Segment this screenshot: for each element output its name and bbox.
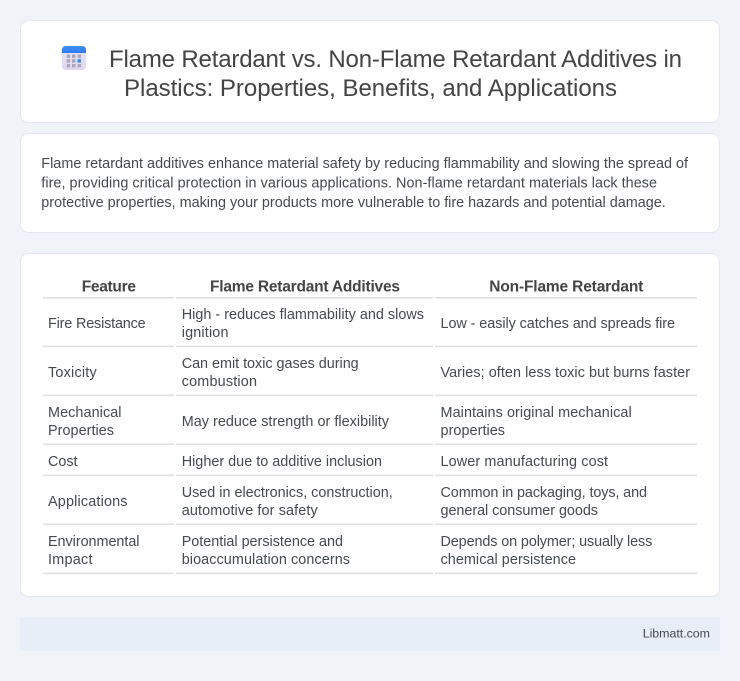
- row: environmental impact: chemical persistence: [440, 552, 576, 568]
- table header row: Non-Flame Retardant: [489, 279, 643, 296]
- row: environmental impact: Depends on polymer; usually less: [440, 534, 652, 550]
- row: fire resistance: High - reduces flammability and slows: [182, 307, 424, 323]
- title: Plastics: Properties, Benefits, and Applications: [124, 75, 617, 102]
- comparison table panel: [20, 254, 720, 596]
- row: mechanical properties: [48, 405, 632, 439]
- row: environmental impact: Environmental: [48, 534, 140, 550]
- table header row: Flame Retardant Additives: [210, 279, 400, 296]
- row: environmental impact: Potential persistence and: [182, 534, 343, 550]
- row: environmental impact: [48, 534, 652, 568]
- row: toxicity: Can emit toxic gases during: [182, 356, 359, 372]
- row: applications: Common in packaging, toys, and: [440, 485, 647, 501]
- row: fire resistance: ignition: [182, 325, 228, 341]
- title: Flame Retardant vs. Non-Flame Retardant Additives in: [109, 46, 682, 73]
- intro text: fire, providing critical protection in various applications. Non-flame retardant materials lack these: [41, 176, 657, 192]
- row: toxicity: combustion: [182, 374, 257, 390]
- intro text: [41, 156, 689, 211]
- table header row: Feature: [82, 279, 136, 296]
- row: toxicity: Toxicity: [48, 365, 97, 381]
- row: applications: general consumer goods: [440, 503, 598, 519]
- row: mechanical properties: Mechanical: [48, 405, 122, 421]
- table header row: [82, 279, 643, 296]
- row: mechanical properties: Maintains original mechanical: [440, 405, 632, 421]
- intro panel: [20, 134, 720, 232]
- row: cost: Higher due to additive inclusion: [182, 454, 382, 470]
- row: fire resistance: Fire Resistance: [48, 316, 146, 332]
- row: toxicity: Varies; often less toxic but burns faster: [440, 365, 690, 381]
- row: mechanical properties: May reduce strength or flexibility: [182, 414, 390, 430]
- intro text: protective properties, making your products more vulnerable to fire hazards and potential damage.: [41, 195, 666, 211]
- row: applications: Used in electronics, construction,: [182, 485, 393, 501]
- row: mechanical properties: properties: [440, 423, 505, 439]
- row: fire resistance: [48, 307, 675, 341]
- row: applications: [48, 485, 647, 519]
- icon: calendar: [62, 46, 86, 70]
- footer bar: [20, 617, 720, 651]
- row: applications: Applications: [48, 494, 128, 510]
- title: [109, 46, 682, 102]
- row: mechanical properties: Properties: [48, 423, 114, 439]
- intro text: Flame retardant additives enhance material safety by reducing flammability and slowing the spread of: [41, 156, 689, 172]
- row: environmental impact: bioaccumulation concerns: [182, 552, 350, 568]
- row: cost: Cost: [48, 454, 78, 470]
- row: cost: Lower manufacturing cost: [440, 454, 608, 470]
- row: fire resistance: Low - easily catches and spreads fire: [440, 316, 675, 332]
- row: applications: automotive for safety: [182, 503, 318, 519]
- header panel: [20, 20, 720, 122]
- footer credit: Libmatt.com: [643, 627, 710, 641]
- row: toxicity: [48, 356, 690, 390]
- row: cost: [48, 454, 608, 470]
- row: environmental impact: Impact: [48, 552, 92, 568]
